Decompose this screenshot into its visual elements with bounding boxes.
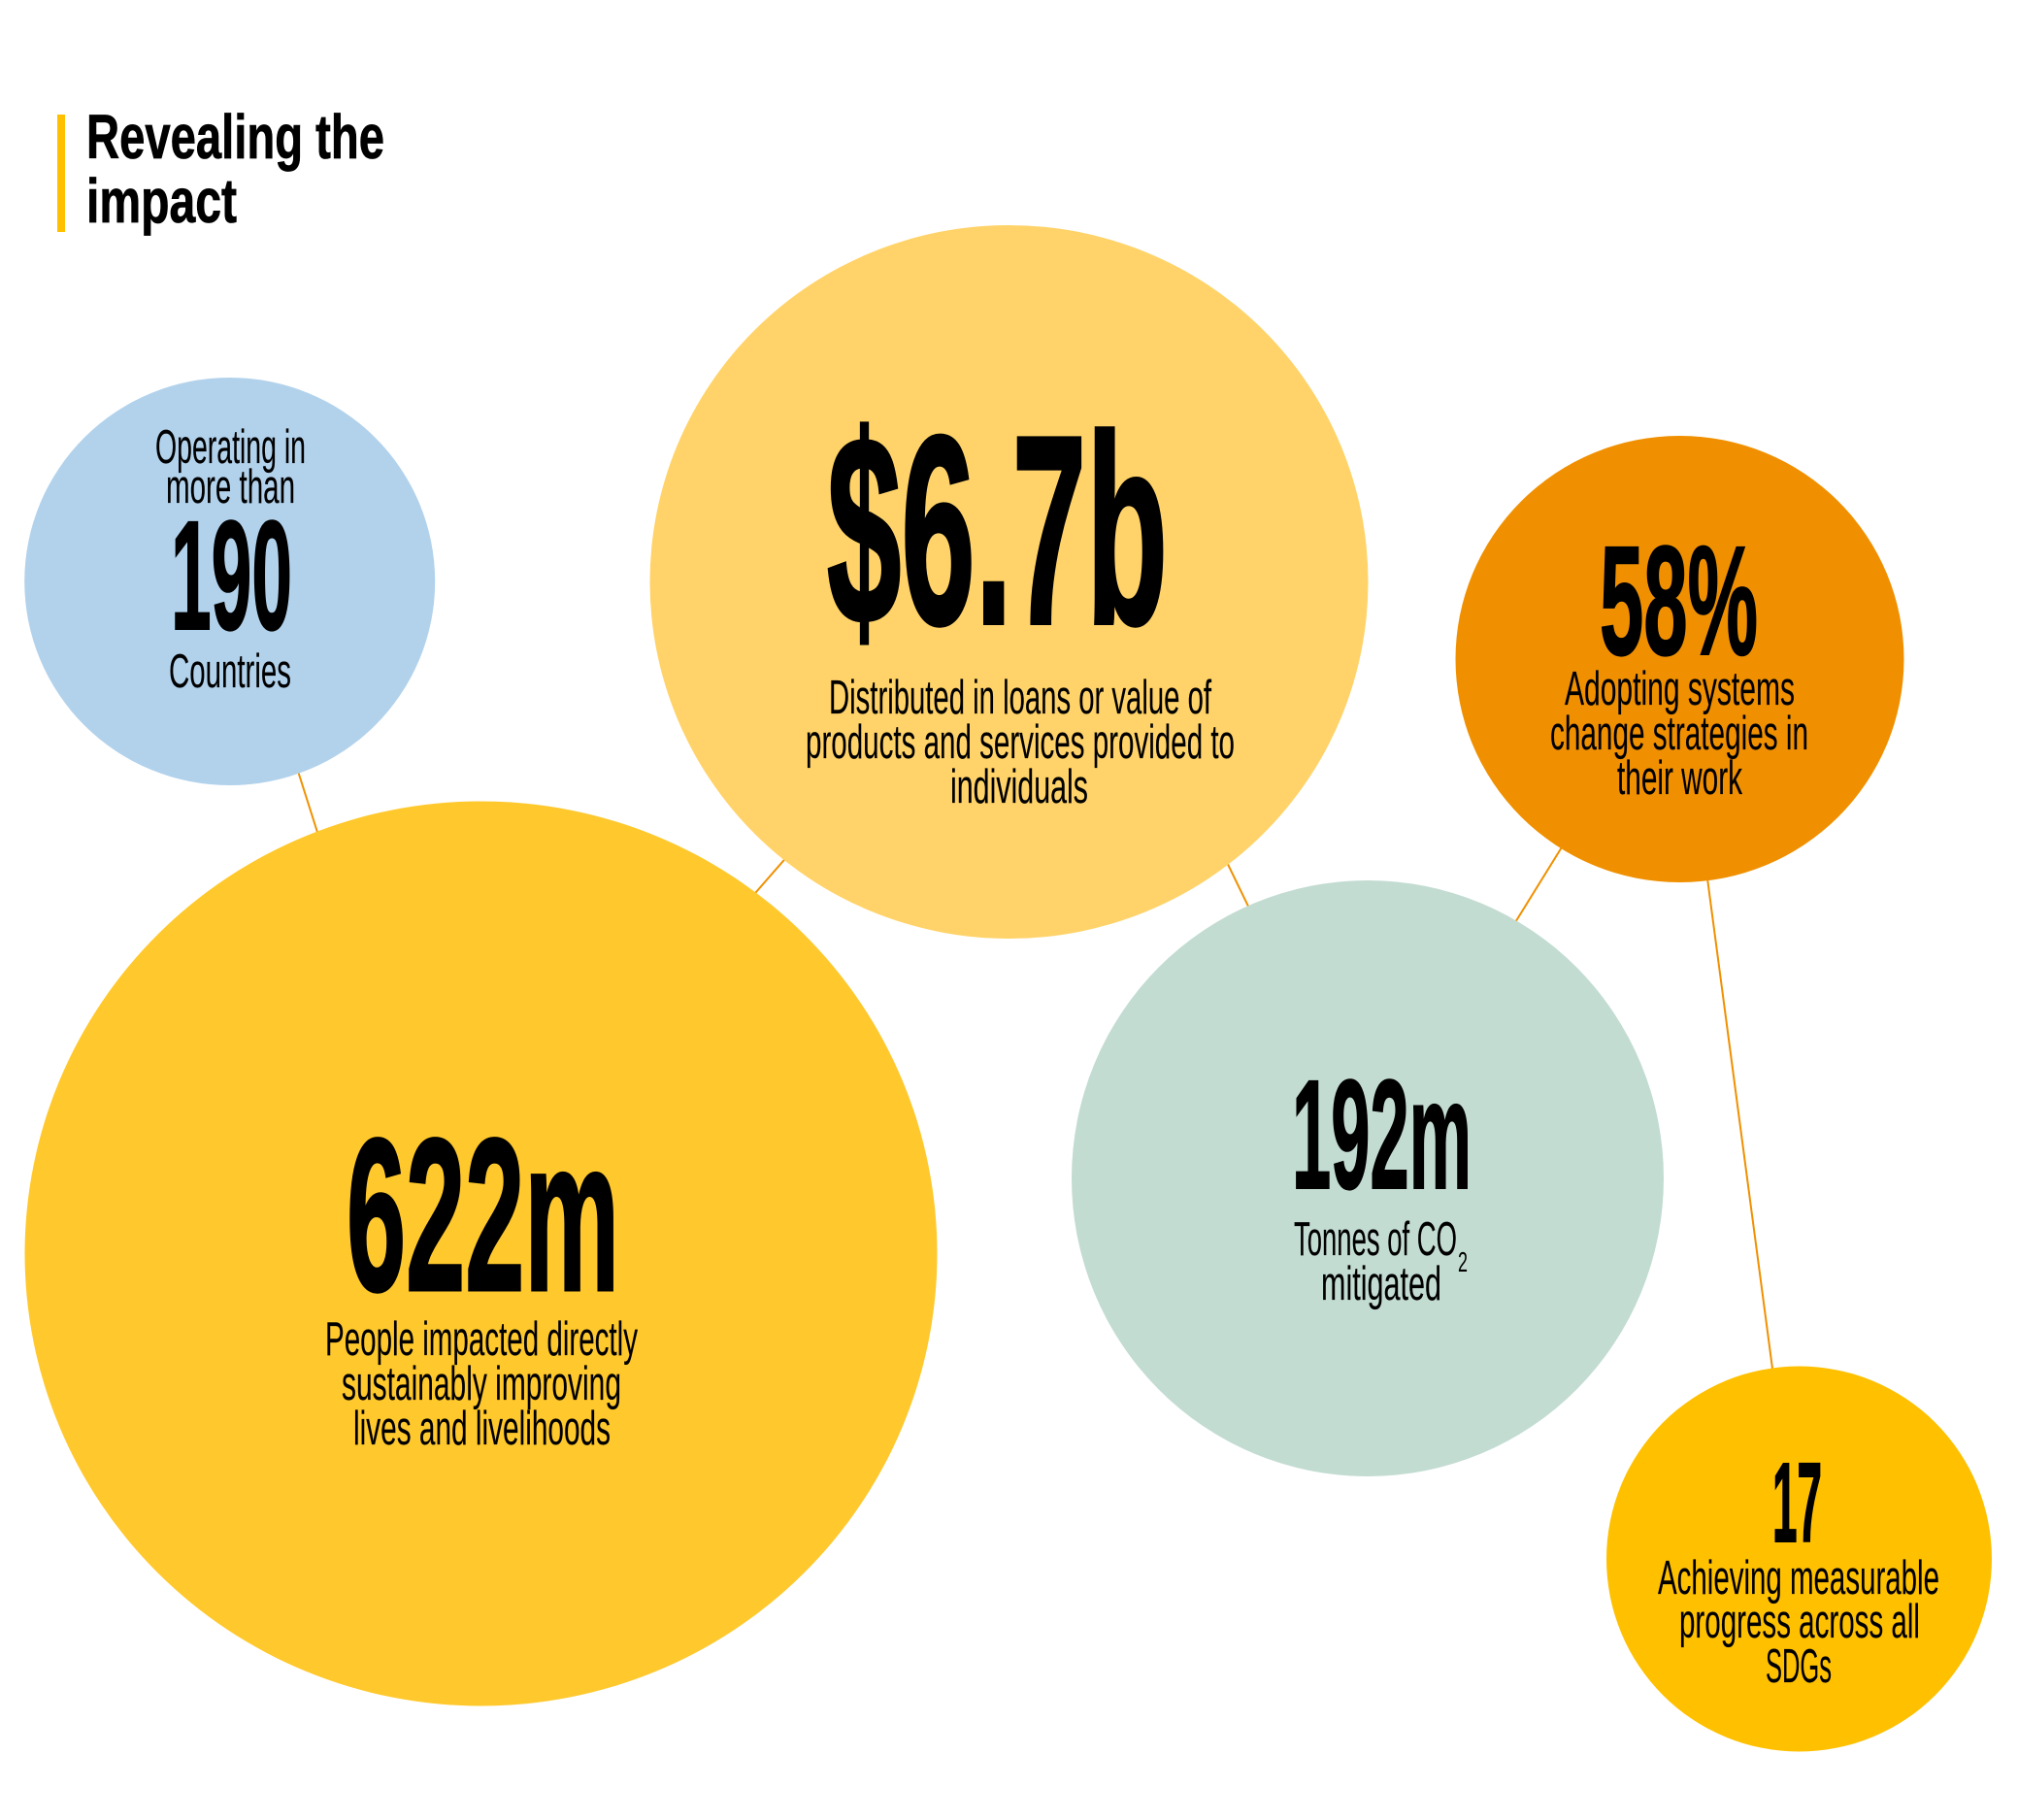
panel: 192m tonnes of CO2: mitigated (1321, 1258, 1441, 1310)
panel: 190 countries: Countries (169, 645, 291, 698)
panel: $6.7b distributed (650, 225, 1369, 939)
panel: 192m tonnes of CO2: 192m (1292, 1047, 1472, 1221)
panel: 58% systems change (1456, 436, 1904, 882)
heading (57, 102, 384, 236)
panel: $6.7b distributed: Distributed in loans or value of (829, 672, 1211, 724)
panel: 17 SDGs: SDGs (1766, 1640, 1832, 1693)
panel: 17 SDGs: 17 (1772, 1439, 1822, 1566)
panel: 190 countries: more than (166, 461, 295, 513)
panel: 58% systems change: Adopting systems (1565, 663, 1795, 715)
panel: 622m people impacted: sustainably improving (342, 1358, 621, 1410)
panel: 622m people impacted: People impacted directly (325, 1313, 638, 1366)
panel: 17 SDGs (1606, 1367, 1992, 1751)
panel: $6.7b distributed: products and services provided to (806, 716, 1235, 769)
connector lines (295, 762, 1774, 1383)
panel: 190 countries: Operating in (155, 421, 306, 474)
panel: 58% systems change: change strategies in (1550, 708, 1808, 760)
heading: Revealing the (86, 102, 384, 172)
heading: impact (86, 166, 237, 236)
panel: 192m tonnes of CO2 (1072, 880, 1664, 1476)
panel: 192m tonnes of CO2: Tonnes of CO (1294, 1213, 1457, 1266)
panel: $6.7b distributed: $6.7b (827, 380, 1168, 680)
panel: 58% systems change: 58% (1600, 513, 1758, 687)
panel: 190 countries: 190 (171, 488, 292, 662)
panel: 192m tonnes of CO2: 2 (1458, 1247, 1468, 1278)
panel: $6.7b distributed: individuals (950, 761, 1088, 813)
panel: 190 countries (24, 378, 435, 785)
panel: 622m people impacted: lives and livelihoods (353, 1403, 611, 1455)
panel: 622m people impacted (25, 802, 938, 1706)
panel: 58% systems change: their work (1617, 752, 1742, 805)
panel: 622m people impacted: 622m (347, 1094, 619, 1337)
